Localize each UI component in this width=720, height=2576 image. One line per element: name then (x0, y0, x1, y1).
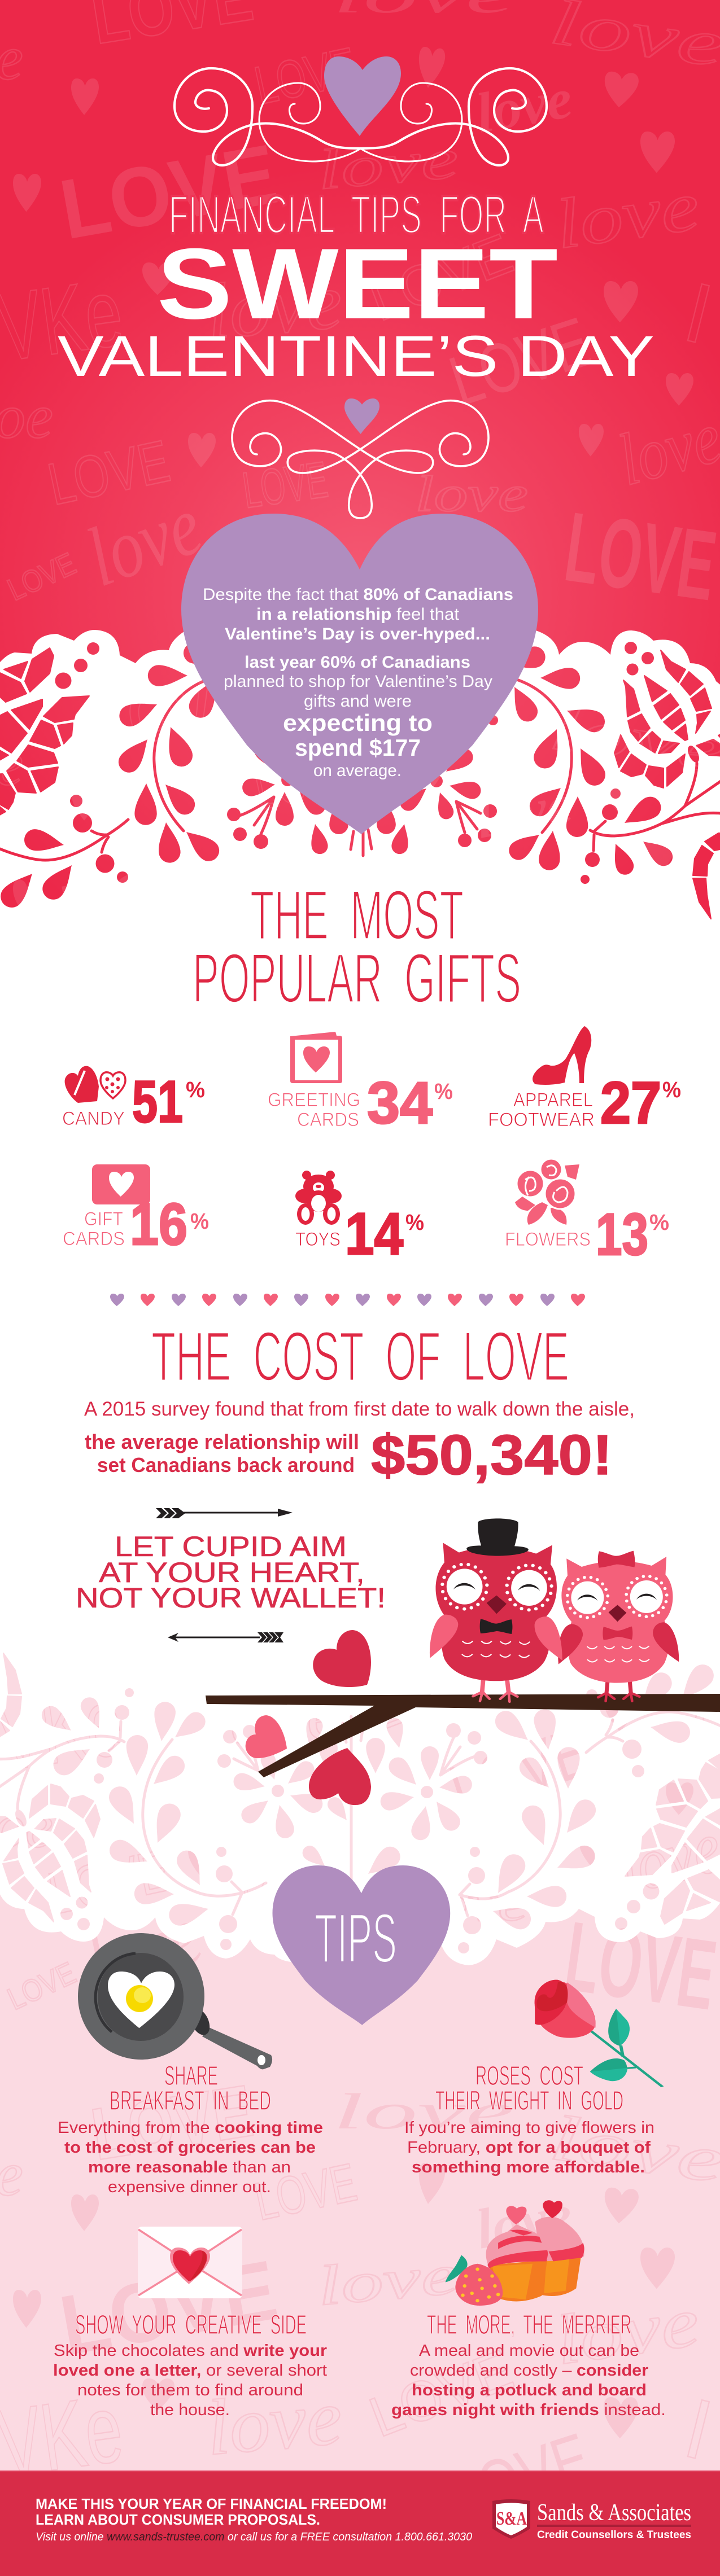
tip: the more, the merrier: games night with friends instead. (391, 2401, 666, 2419)
tip: roses cost their weight in gold: February, opt for a bouquet of (407, 2139, 651, 2157)
icon: teddy bear (295, 1171, 342, 1225)
text block: survey cost: set Canadians back around (97, 1453, 355, 1477)
text block: survey cost: the average relationship will (85, 1430, 359, 1453)
icon: chocolate boxes (65, 1066, 125, 1103)
callout: big purple heart with intro stats: expecting to (283, 709, 433, 736)
stat: candy 51%: 51 (132, 1069, 183, 1135)
callout: big purple heart with intro stats: planned to shop for Valentine’s Day (224, 672, 492, 691)
callout: big purple heart with intro stats: Despite the fact that 80% of Canadians (203, 585, 513, 604)
tip: the more, the merrier: A meal and movie out can be (419, 2342, 639, 2360)
stat: greeting cards 34%: % (434, 1079, 453, 1104)
tip: share breakfast in bed: BREAKFAST IN BED (110, 2086, 271, 2116)
title: SWEET (157, 227, 558, 340)
stat: gift cards 16%: % (190, 1209, 209, 1234)
icon: love letter envelope (138, 2227, 242, 2298)
heading: the most popular gifts: THE MOST (250, 877, 464, 954)
stat: candy 51%: % (186, 1077, 205, 1102)
stat: flowers 13% (505, 1159, 669, 1268)
callout: big purple heart with intro stats: last year 60% of Canadians (245, 653, 470, 672)
tip: share breakfast in bed: more reasonable than an (88, 2158, 291, 2176)
callout: let cupid aim: NOT YOUR WALLET! (76, 1582, 386, 1614)
arrow: pointing right (156, 1508, 293, 1518)
tip: share breakfast in bed: to the cost of groceries can be (64, 2139, 316, 2157)
icon: cupcakes and strawberry (446, 2200, 584, 2306)
logo: Sands and Associates (492, 2499, 691, 2541)
owls on branch (430, 1518, 679, 1702)
callout: big purple heart with intro stats: in a relationship feel that (256, 605, 460, 624)
owl: male with top hat (430, 1518, 562, 1702)
stat: apparel footwear 27%: APPAREL (513, 1089, 593, 1111)
icon: gift card (92, 1164, 150, 1204)
callout: let cupid aim: AT YOUR HEART, (99, 1557, 365, 1588)
title (58, 185, 654, 388)
tip: share breakfast in bed (58, 2061, 323, 2196)
icon: rose bouquet (515, 1159, 579, 1225)
tip: the more, the merrier: hosting a potluck and board (412, 2381, 647, 2399)
stat: toys 14%: TOYS (295, 1229, 341, 1250)
tips heart: TIPS (315, 1900, 397, 1978)
text block: survey cost: $50,340! (371, 1423, 613, 1487)
callout: big purple heart with intro stats: gifts and were (304, 692, 412, 711)
icon: frying pan with heart egg (78, 1933, 272, 2069)
tip: share breakfast in bed: SHARE (164, 2061, 218, 2091)
stat: greeting cards 34%: 34 (367, 1070, 433, 1136)
ornament: top flourish with purple heart (174, 56, 547, 165)
stat: greeting cards 34%: GREETING (268, 1089, 360, 1111)
tip: show your creative side: the house. (150, 2401, 230, 2419)
divider: row of hearts (110, 1294, 585, 1306)
callout: big purple heart with intro stats: Valentine’s Day is over-hyped... (225, 625, 490, 643)
stat: greeting cards 34% (268, 1032, 453, 1136)
stat: toys 14%: 14 (345, 1201, 403, 1267)
arrow: pointing left (168, 1632, 283, 1642)
footer text (36, 2495, 472, 2543)
logo: Sands and Associates: Sands & Associates (537, 2500, 691, 2526)
tip: show your creative side: SHOW YOUR CREATIVE SIDE (75, 2310, 307, 2340)
background: pink tips panel (0, 1653, 720, 2470)
callout: big purple heart with intro stats: on average. (313, 761, 402, 780)
tip: roses cost their weight in gold: ROSES COST (475, 2061, 583, 2091)
footer (0, 2470, 720, 2576)
stat: candy 51%: CANDY (62, 1108, 125, 1129)
tips heart (272, 1865, 450, 2025)
tip: show your creative side: Skip the chocolates and write your (54, 2342, 327, 2360)
logo: Sands and Associates: S&A (496, 2508, 527, 2529)
stat: apparel footwear 27% (488, 1026, 681, 1136)
owl: female pink (558, 1551, 679, 1701)
icon: greeting card (290, 1032, 342, 1083)
stat: gift cards 16%: GIFT (84, 1208, 123, 1230)
text block: survey cost: A 2015 survey found that from first date to walk down the aisle, (84, 1398, 635, 1420)
heading: the most popular gifts (193, 877, 521, 1018)
stat: candy 51% (62, 1066, 205, 1135)
stat: toys 14%: % (405, 1210, 424, 1235)
stat: toys 14% (295, 1171, 424, 1267)
stat: flowers 13%: 13 (596, 1202, 648, 1268)
stat: gift cards 16% (63, 1164, 209, 1258)
stat: apparel footwear 27%: % (662, 1077, 681, 1102)
tip: roses cost their weight in gold: If you’re aiming to give flowers in (404, 2119, 654, 2137)
tip: the more, the merrier: crowded and costly – consider (410, 2362, 648, 2380)
stat: gift cards 16%: 16 (130, 1191, 187, 1258)
stat: apparel footwear 27%: FOOTWEAR (488, 1109, 595, 1131)
stat: greeting cards 34%: CARDS (297, 1109, 359, 1131)
branch (206, 1694, 720, 1777)
tip: the more, the merrier (391, 2310, 666, 2419)
stat: apparel footwear 27%: 27 (600, 1070, 661, 1136)
white paper lace, lower (0, 1601, 720, 1968)
callout: let cupid aim: LET CUPID AIM (115, 1531, 347, 1562)
stat: flowers 13%: FLOWERS (505, 1229, 591, 1250)
icon: high heel shoe (533, 1026, 591, 1085)
tip: show your creative side (53, 2310, 327, 2419)
stat: gift cards 16%: CARDS (63, 1228, 125, 1250)
white paper lace, top (0, 604, 720, 971)
callout: big purple heart with intro stats: spend $177 (295, 734, 421, 761)
footer text: MAKE THIS YOUR YEAR OF FINANCIAL FREEDOM! (36, 2495, 387, 2512)
title: VALENTINE’S DAY (58, 324, 654, 388)
background: red gradient hero (0, 0, 720, 919)
footer text: LEARN ABOUT CONSUMER PROPOSALS. (36, 2511, 320, 2528)
tip: roses cost their weight in gold: something more affordable. (412, 2158, 645, 2176)
tip: share breakfast in bed: expensive dinner out. (108, 2178, 271, 2196)
logo: Sands and Associates: Credit Counsellors & Trustees (537, 2529, 691, 2541)
icon: rose (535, 1980, 662, 2087)
tip: share breakfast in bed: Everything from the cooking time (58, 2119, 323, 2137)
tip: show your creative side: loved one a letter, or several short (53, 2362, 327, 2380)
footer text: Visit us online www.sands-trustee.com or call us for a FREE consultation 1.800.661.3030 (36, 2531, 472, 2543)
tip: show your creative side: notes for them to find around (77, 2381, 303, 2399)
ornament: lower flourish with small heart (232, 398, 488, 518)
text block: survey cost (84, 1398, 635, 1487)
stat: flowers 13%: % (649, 1210, 669, 1235)
hearts hanging around branch (246, 1630, 371, 1805)
callout: let cupid aim (76, 1531, 386, 1614)
callout: big purple heart with intro stats (181, 514, 538, 834)
tip: roses cost their weight in gold (404, 2061, 654, 2176)
